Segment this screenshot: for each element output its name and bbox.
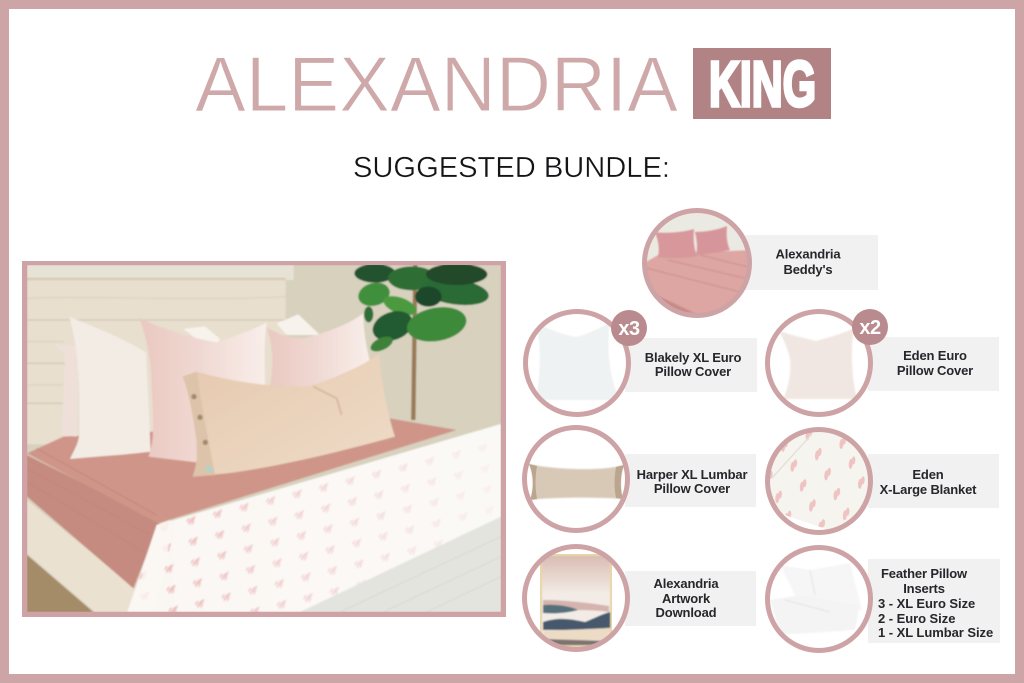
badge: King: KING xyxy=(709,48,816,120)
pink pillow left xyxy=(139,318,267,462)
item: Feather Pillow Inserts xyxy=(767,547,1000,651)
label box xyxy=(625,338,757,392)
ring xyxy=(768,312,870,414)
name and quantities: 1 - XL Lumbar Size xyxy=(878,625,993,640)
title: Alexandria: ALEXANDRIA xyxy=(195,40,678,128)
badge: King xyxy=(693,48,831,120)
label box xyxy=(745,235,878,290)
thumbnail xyxy=(770,432,868,529)
name and quantities: 2 - Euro Size xyxy=(878,611,955,626)
name xyxy=(880,467,977,497)
item: Eden X-Large Blanket xyxy=(767,429,999,533)
thumbnail xyxy=(647,213,747,313)
name: Pillow Cover xyxy=(897,363,973,378)
name: Eden xyxy=(912,467,944,482)
thumbnail xyxy=(771,564,860,634)
ring xyxy=(768,548,870,650)
badge: x3: x3 xyxy=(618,318,640,340)
name: Eden Euro xyxy=(903,348,967,363)
name xyxy=(645,350,741,379)
ring xyxy=(526,312,628,414)
plant xyxy=(354,264,490,420)
headboard xyxy=(27,278,286,444)
label box xyxy=(868,559,1000,643)
name: Beddy's xyxy=(783,262,833,277)
thumbnail xyxy=(780,328,856,400)
name and quantities xyxy=(878,566,993,640)
name xyxy=(637,467,747,496)
name: Pillow Cover xyxy=(655,364,731,379)
bed frame and floor xyxy=(27,500,135,612)
far pillow xyxy=(56,344,78,438)
panel: bedroom photo xyxy=(22,261,506,617)
wall xyxy=(27,265,501,612)
name and quantities: Feather Pillow xyxy=(881,566,968,581)
name and quantities: 3 - XL Euro Size xyxy=(878,596,975,611)
badge: x2 xyxy=(852,309,888,345)
name: Pillow Cover xyxy=(654,481,730,496)
ring xyxy=(524,428,628,530)
badge: x3 xyxy=(611,310,647,346)
name: Artwork xyxy=(662,591,711,606)
white back pillows xyxy=(184,314,319,342)
thumbnail xyxy=(540,554,612,647)
badge: x2: x2 xyxy=(859,317,881,339)
name xyxy=(897,348,973,378)
pink pillow right xyxy=(267,313,370,387)
label box xyxy=(625,571,756,626)
quilt xyxy=(300,517,501,612)
name: Blakely XL Euro xyxy=(645,350,741,365)
name xyxy=(776,246,841,277)
name: Alexandria xyxy=(654,576,719,591)
label box xyxy=(625,454,756,507)
name: Alexandria xyxy=(776,246,841,262)
heading: suggested bundle: SUGGESTED BUNDLE: xyxy=(353,152,670,184)
item: Alexandria Beddy's xyxy=(644,210,878,320)
item: Blakely XL Euro Pillow Cover xyxy=(525,310,757,415)
blanket xyxy=(127,424,501,612)
item: Harper XL Lumbar Pillow Cover xyxy=(524,427,756,531)
name: Harper XL Lumbar xyxy=(637,467,747,482)
ring xyxy=(644,210,750,316)
white pillow xyxy=(69,317,151,459)
label box xyxy=(868,454,999,508)
mattress sides and top xyxy=(27,418,457,588)
ring xyxy=(524,546,628,650)
name and quantities: Inserts xyxy=(903,581,945,596)
ring xyxy=(768,430,870,532)
thumbnail xyxy=(529,464,624,500)
lumbar pillow xyxy=(183,353,395,477)
label box xyxy=(868,337,999,391)
item: Eden Euro Pillow Cover xyxy=(767,309,999,415)
item: Alexandria Artwork Download xyxy=(524,546,756,650)
name: X-Large Blanket xyxy=(880,482,977,497)
thumbnail xyxy=(538,324,626,400)
name: Download xyxy=(656,605,717,620)
name xyxy=(654,576,719,620)
